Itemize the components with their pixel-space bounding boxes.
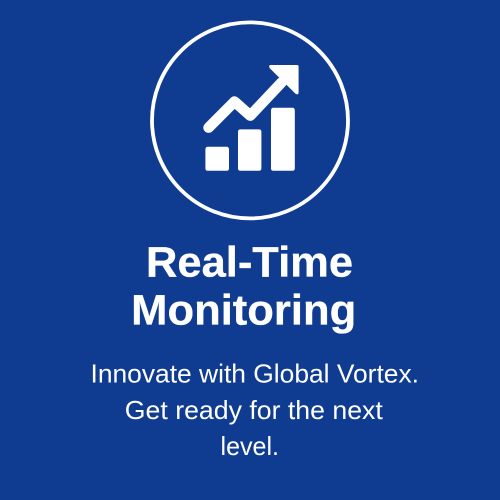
body text: Get ready for the next (125, 395, 384, 425)
body text: Innovate with Global Vortex. (90, 358, 419, 388)
title: Monitoring (131, 286, 356, 334)
title: Real-Time (146, 238, 353, 286)
icon: rising arrow (209, 65, 299, 128)
icon: bars (205, 108, 295, 171)
body text: level. (220, 431, 279, 461)
icon: growth chart in circle (152, 22, 348, 218)
body text (90, 358, 419, 461)
title (131, 238, 356, 334)
